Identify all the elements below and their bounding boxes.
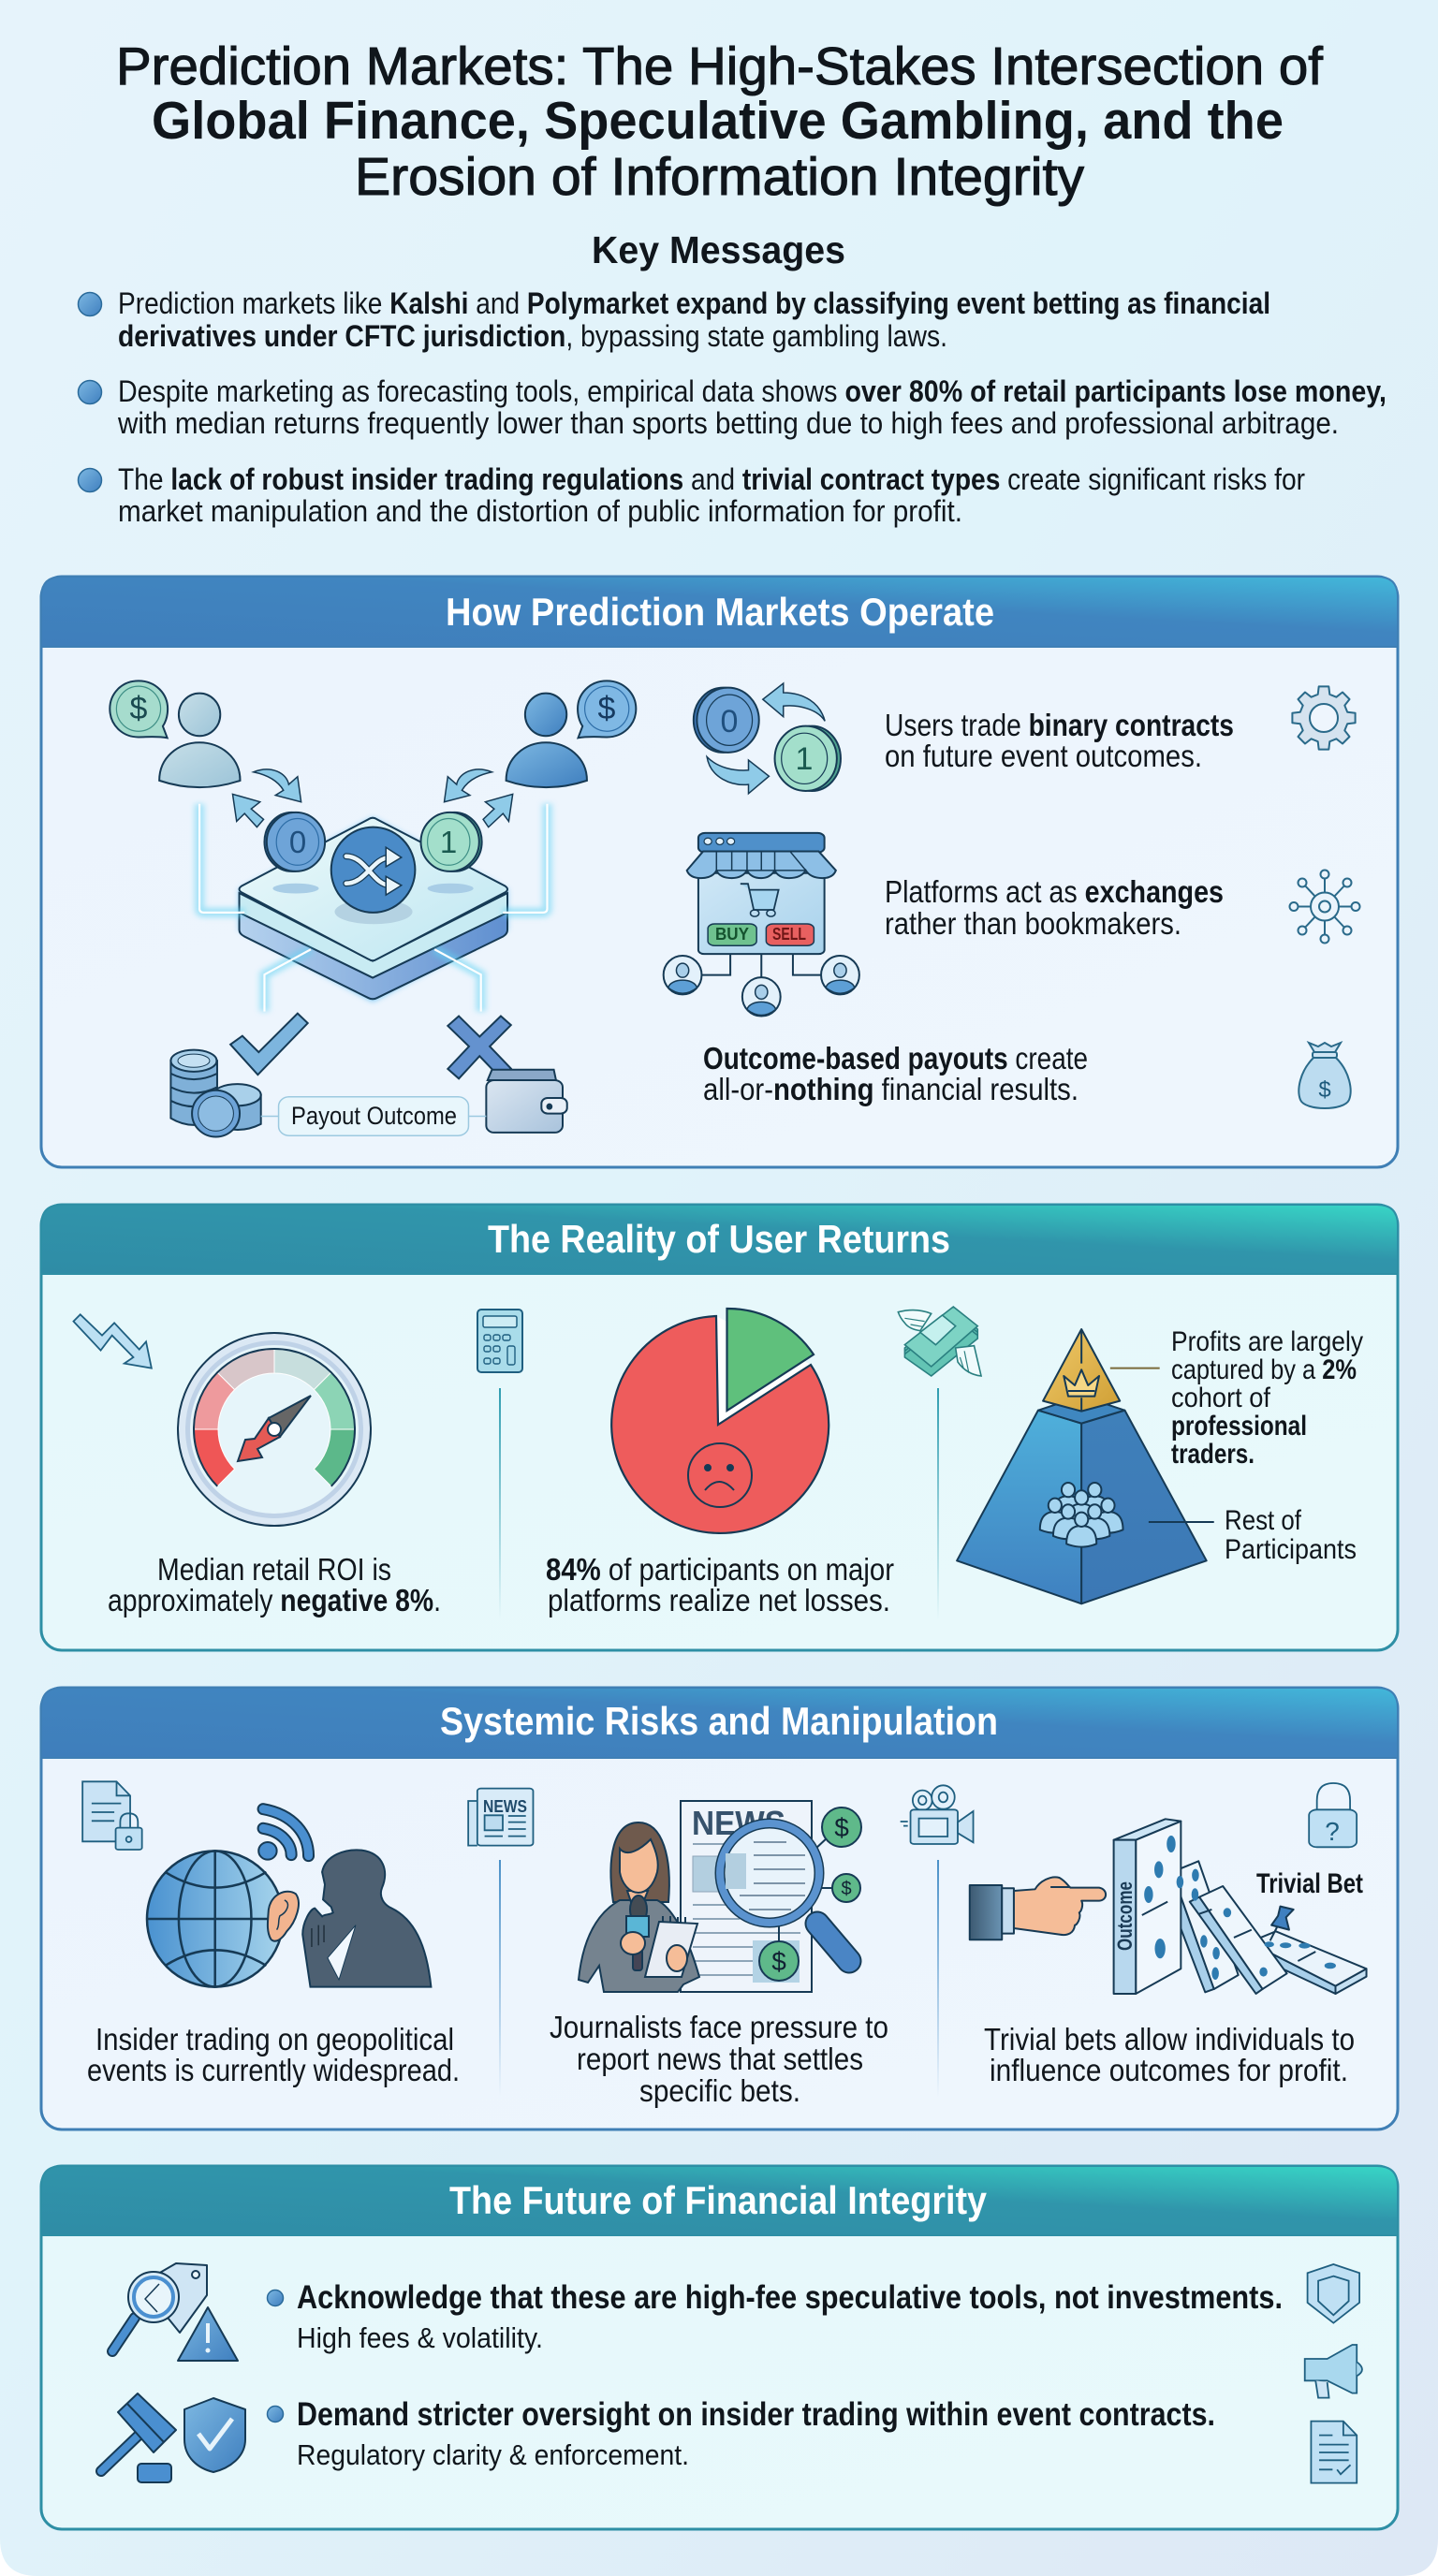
text: payouts bbox=[703, 1041, 1088, 1106]
icon: video camera bbox=[901, 1785, 974, 1844]
icon: money bag: $ bbox=[1318, 1077, 1331, 1103]
icon: megaphone bbox=[1305, 2345, 1362, 2398]
dollar coins bbox=[759, 1808, 861, 1981]
text: exchanges bbox=[885, 874, 1224, 941]
text: trivial bets: Trivial bets allow individuals to bbox=[984, 2022, 1355, 2056]
shuffle bbox=[331, 827, 415, 913]
journalist with newspaper and magnifier: $ bbox=[841, 1879, 852, 1899]
coin stacks bbox=[170, 1050, 261, 1136]
diagram text: Payout Outcome bbox=[291, 1102, 457, 1130]
key point 1: High fees & volatility. bbox=[297, 2321, 543, 2354]
key point 2: Demand stricter oversight on insider trading within event contracts. bbox=[297, 2396, 1215, 2433]
title: Erosion of Information Integrity bbox=[355, 147, 1084, 207]
diagram text: 0 bbox=[289, 825, 306, 859]
dominoes with pointing hand bbox=[970, 1819, 1367, 1994]
text: profits: Profits are largely bbox=[1171, 1326, 1363, 1357]
exchange diagram bbox=[110, 681, 636, 1136]
icon: flying money bbox=[898, 1307, 981, 1376]
icon: shield bbox=[1308, 2264, 1359, 2323]
wallet bbox=[486, 1070, 567, 1133]
icon: gavel and shield bbox=[101, 2393, 245, 2482]
heading: The Future of Financial Integrity bbox=[449, 2178, 988, 2222]
coin exchange icon: 1 bbox=[796, 741, 813, 777]
text: payouts: Outcome-based payouts create bbox=[703, 1041, 1088, 1076]
coins bbox=[264, 812, 482, 871]
magnifier bbox=[720, 1823, 849, 1961]
text: rest of participants: Participants bbox=[1225, 1534, 1357, 1565]
left user bbox=[110, 681, 241, 787]
heading: key messages: Key Messages bbox=[592, 228, 845, 271]
bullet 3: market manipulation and the distortion of public information for profit. bbox=[118, 494, 962, 528]
icon: document checklist bbox=[1311, 2422, 1357, 2483]
journalist bbox=[579, 1822, 699, 1992]
icon: magnifier, tag and warning bbox=[112, 2263, 238, 2361]
icon: padlock with question mark bbox=[1309, 1783, 1357, 1847]
icon: falling arrow bbox=[73, 1314, 152, 1368]
bullet 3 bbox=[79, 462, 1305, 528]
panel: how prediction markets operate bbox=[41, 577, 1398, 1167]
coin exchange icon bbox=[694, 683, 841, 794]
first domino bbox=[1114, 1819, 1181, 1840]
newspaper: NEWS bbox=[692, 1804, 785, 1842]
icon: marketplace store: SELL bbox=[772, 925, 806, 944]
text: binary contracts: on future event outcomes. bbox=[885, 739, 1202, 773]
heading: The Reality of User Returns bbox=[488, 1217, 950, 1261]
bullet 2: with median returns frequently lower than sports betting due to high fees and professional arbitrage. bbox=[117, 406, 1339, 440]
bullet 2 bbox=[79, 374, 1387, 440]
bullet 1 bbox=[79, 286, 1270, 353]
text: rest of participants: Rest of bbox=[1225, 1505, 1302, 1536]
text: journalists: Journalists face pressure to bbox=[550, 2010, 888, 2044]
panel: systemic risks and manipulation bbox=[41, 1688, 1398, 2130]
key messages list bbox=[79, 286, 1387, 528]
text: trivial bets bbox=[984, 2022, 1355, 2087]
text: exchanges: Platforms act as exchanges bbox=[885, 874, 1224, 909]
heading: How Prediction Markets Operate bbox=[446, 590, 994, 634]
key point 1 bbox=[268, 2279, 1283, 2354]
text: 84 percent: platforms realize net losses. bbox=[548, 1583, 890, 1617]
pyramid bbox=[957, 1329, 1214, 1603]
text: exchanges: rather than bookmakers. bbox=[885, 906, 1181, 941]
journalist with newspaper and magnifier: $ bbox=[834, 1813, 849, 1842]
hand bbox=[970, 1877, 1106, 1939]
diagram text: $ bbox=[598, 691, 616, 726]
text: journalists bbox=[550, 2010, 888, 2108]
icon: money bag bbox=[1299, 1043, 1351, 1108]
sad face bbox=[688, 1443, 752, 1507]
globe bbox=[147, 1851, 283, 1987]
icon: newspaper: NEWS bbox=[483, 1797, 527, 1816]
cross mark bbox=[448, 1017, 511, 1078]
text: payouts: all-or-nothing financial results. bbox=[703, 1072, 1078, 1106]
text: journalists: specific bets. bbox=[639, 2073, 800, 2108]
bullet 1: derivatives under CFTC jurisdiction, bypassing state gambling laws. bbox=[118, 319, 947, 353]
text: 84 percent bbox=[546, 1552, 894, 1617]
pie chart: 84 percent losses bbox=[611, 1309, 829, 1533]
text: insider trading bbox=[87, 2022, 460, 2087]
fourth domino bbox=[1249, 1942, 1336, 1994]
check mark bbox=[230, 1014, 308, 1075]
silhouette bbox=[302, 1850, 431, 1987]
text: profits bbox=[1171, 1326, 1363, 1470]
crown bbox=[1064, 1369, 1099, 1397]
text: profits: traders. bbox=[1171, 1439, 1255, 1470]
text: insider trading: events is currently widespread. bbox=[87, 2053, 460, 2087]
diagram text bbox=[130, 691, 616, 1130]
newspaper bbox=[681, 1801, 812, 1992]
icon: padlock with question mark: ? bbox=[1325, 1817, 1340, 1846]
icon: newspaper bbox=[468, 1789, 533, 1846]
text: profits: captured by a 2% bbox=[1171, 1354, 1357, 1385]
globe with ear and whisperer bbox=[147, 1809, 431, 1987]
participants bbox=[1053, 1483, 1083, 1517]
right user bbox=[506, 681, 636, 787]
key point 2: Regulatory clarity & enforcement. bbox=[297, 2438, 689, 2471]
icon: marketplace store bbox=[664, 833, 859, 1017]
text: 84 percent: 84% of participants on major bbox=[546, 1552, 894, 1587]
key point 2 bbox=[268, 2396, 1215, 2471]
text: median ROI: Median retail ROI is bbox=[157, 1552, 391, 1587]
pin bbox=[1270, 1925, 1278, 1940]
icon: calculator bbox=[477, 1310, 522, 1372]
diagram text: 1 bbox=[440, 825, 457, 859]
platform bbox=[240, 817, 507, 1002]
coin exchange icon: 0 bbox=[721, 704, 738, 739]
text: journalists: report news that settles bbox=[577, 2042, 863, 2076]
text: median ROI bbox=[108, 1552, 441, 1617]
key point 1: Acknowledge that these are high-fee speculative tools, not investments. bbox=[297, 2279, 1283, 2316]
dominoes with pointing hand: Outcome bbox=[1113, 1881, 1137, 1951]
connectors bbox=[199, 804, 547, 1012]
text: binary contracts bbox=[885, 708, 1234, 773]
text: rest of participants bbox=[1225, 1505, 1357, 1565]
panel: the future of financial integrity bbox=[41, 2166, 1398, 2529]
second domino bbox=[1161, 1872, 1214, 1992]
icon: marketplace store: BUY bbox=[715, 925, 749, 944]
text: binary contracts: Users trade binary contracts bbox=[885, 708, 1234, 742]
text: trivial bets: influence outcomes for profit. bbox=[990, 2053, 1348, 2087]
icon: document with lock bbox=[82, 1781, 142, 1850]
icon: gear bbox=[1292, 686, 1356, 750]
title bbox=[116, 37, 1323, 207]
title: Prediction Markets: The High-Stakes Intersection of bbox=[116, 37, 1323, 96]
text: profits: professional bbox=[1171, 1411, 1307, 1442]
text: insider trading: Insider trading on geopolitical bbox=[95, 2022, 454, 2056]
gauge bbox=[178, 1333, 371, 1526]
panel: the reality of user returns bbox=[41, 1205, 1398, 1650]
bullet 2: Despite marketing as forecasting tools, empirical data shows over 80% of retail participants lose money, bbox=[118, 374, 1387, 408]
text: median ROI: approximately negative 8%. bbox=[108, 1583, 441, 1617]
signal bbox=[263, 1809, 309, 1856]
bullet 1: Prediction markets like Kalshi and Polymarket expand by classifying event betting as financial bbox=[118, 286, 1270, 320]
bullet 3: The lack of robust insider trading regulations and trivial contract types create significant risks for bbox=[118, 462, 1305, 496]
dominoes with pointing hand: Trivial Bet bbox=[1256, 1868, 1363, 1899]
text: profits: cohort of bbox=[1171, 1383, 1271, 1413]
heading: Systemic Risks and Manipulation bbox=[440, 1699, 998, 1743]
icon: network bbox=[1290, 871, 1359, 944]
journalist with newspaper and magnifier: $ bbox=[771, 1947, 786, 1976]
diagram text: $ bbox=[130, 691, 148, 726]
title: Global Finance, Speculative Gambling, and the bbox=[152, 91, 1284, 151]
arrows bbox=[232, 769, 513, 827]
third domino bbox=[1190, 1897, 1263, 1994]
journalist with newspaper and magnifier bbox=[579, 1801, 861, 1992]
